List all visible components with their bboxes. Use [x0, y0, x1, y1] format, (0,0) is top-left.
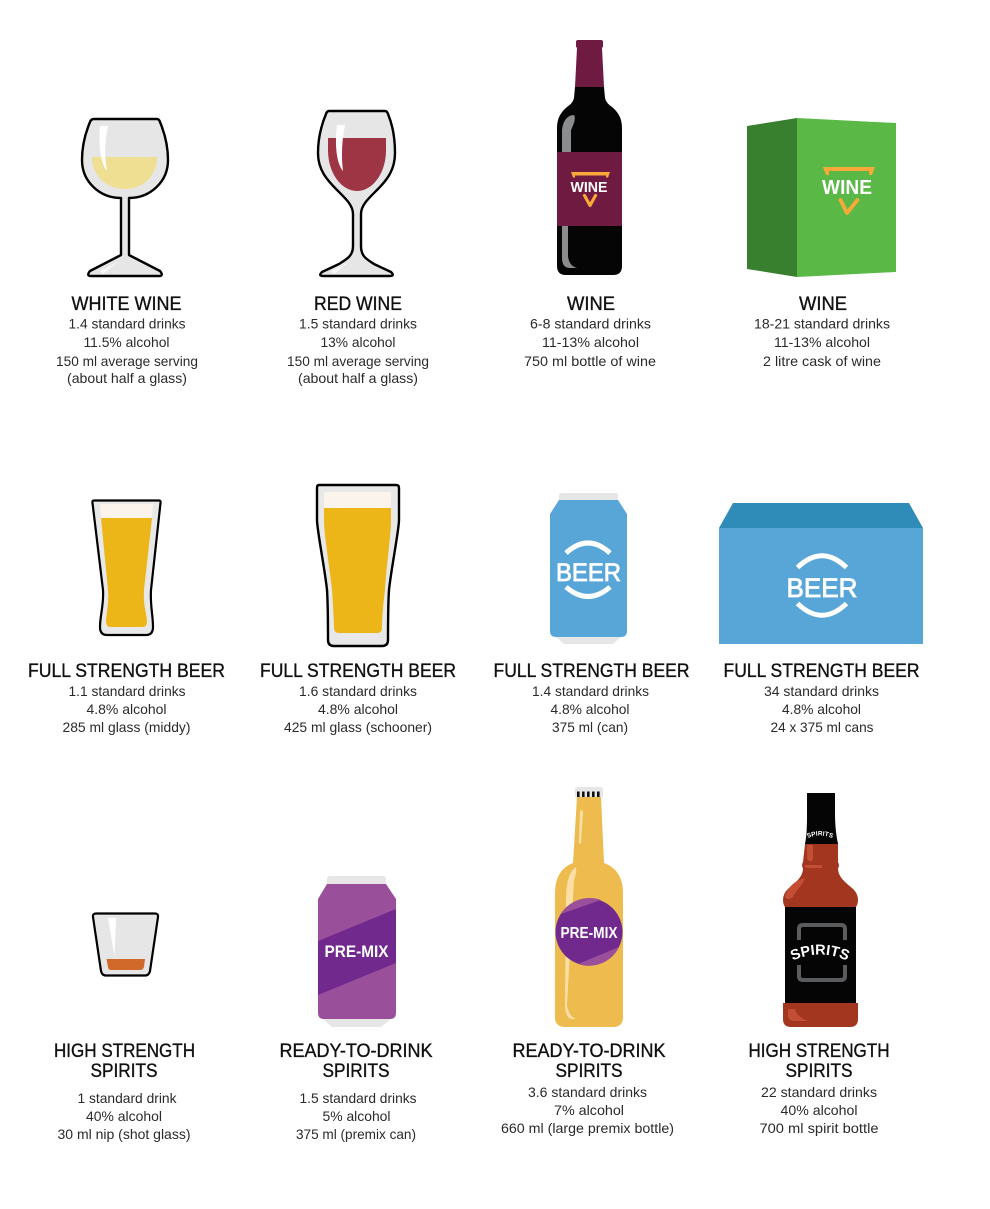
panel: wine cask [747, 118, 896, 369]
panel: beer middy [28, 500, 225, 735]
logo: wine cask label [822, 167, 875, 213]
text: spirits nip details: 1 standard drink [78, 1090, 177, 1106]
text: premix bottle details: 3.6 standard drinks [528, 1084, 647, 1100]
panel: red wine [287, 111, 429, 386]
panel: wine bottle [524, 40, 656, 369]
icon: spirits bottle [783, 793, 858, 1027]
text: beer can details: 375 ml (can) [552, 719, 628, 735]
text: premix bottle details: 660 ml (large premix bottle) [501, 1120, 674, 1136]
text: premix bottle details: 7% alcohol [554, 1102, 624, 1118]
text: wine bottle details: WINE [567, 294, 615, 315]
text: beer schooner details: FULL STRENGTH BEER [260, 661, 456, 682]
label: pre-mix: PRE-MIX [560, 925, 618, 942]
panel: beer carton [719, 503, 923, 735]
text: red wine details: 13% alcohol [320, 334, 396, 350]
icon: white wine glass [82, 119, 168, 276]
text: spirits nip details: 40% alcohol [86, 1108, 162, 1124]
text: premix can details: 375 ml (premix can) [296, 1126, 416, 1142]
text: wine cask details: 18-21 standard drinks [754, 316, 890, 332]
text: red wine details: 1.5 standard drinks [299, 316, 417, 332]
text: spirits bottle details: HIGH STRENGTH [748, 1041, 890, 1062]
text: wine cask details: 11-13% alcohol [774, 334, 870, 350]
text: beer schooner details: 425 ml glass (schooner) [284, 719, 432, 735]
text: beer can details: 4.8% alcohol [550, 701, 630, 717]
text: wine bottle details: 6-8 standard drinks [530, 316, 651, 332]
text: wine bottle details: 11-13% alcohol [542, 334, 639, 350]
text: spirits bottle details: 40% alcohol [780, 1102, 858, 1118]
text: wine cask details: WINE [799, 294, 847, 315]
text: beer schooner details: 4.8% alcohol [318, 701, 398, 717]
panel: beer can [494, 493, 690, 735]
text: beer carton details: 34 standard drinks [764, 683, 879, 699]
label: pre-mix: PRE-MIX [324, 942, 389, 961]
text: spirits bottle details: SPIRITS [786, 1061, 852, 1082]
text: premix can details: 5% alcohol [322, 1108, 390, 1124]
text: premix bottle details [501, 1041, 674, 1136]
text: beer carton details: 24 x 375 ml cans [770, 719, 874, 735]
panel: premix can [280, 876, 433, 1142]
text: beer schooner details [260, 661, 456, 735]
text: spirits nip details: 30 ml nip (shot glass) [58, 1126, 190, 1142]
icon: green wine cask [747, 118, 896, 277]
text: beer middy details: FULL STRENGTH BEER [28, 661, 225, 682]
text: white wine details [56, 294, 198, 386]
text: premix can details: READY-TO-DRINK [280, 1041, 433, 1062]
text: wine cask details: 2 litre cask of wine [763, 353, 881, 369]
logo: beer carton label [786, 556, 858, 615]
logo: beer can label [556, 543, 621, 596]
text: white wine details: 11.5% alcohol [84, 334, 170, 350]
text: red wine details: 150 ml average serving [287, 353, 429, 369]
text: spirits nip details: HIGH STRENGTH [54, 1041, 195, 1062]
text: spirits nip details [54, 1041, 195, 1142]
text: beer schooner details: 1.6 standard drinks [299, 683, 417, 699]
text: premix bottle details: READY-TO-DRINK [512, 1041, 666, 1062]
logo: beer carton label: BEER [786, 573, 858, 603]
text: beer carton details: FULL STRENGTH BEER [724, 661, 920, 682]
icon: shot glass [93, 914, 158, 976]
text: beer middy details: 1.1 standard drinks [68, 683, 186, 699]
text: spirits bottle details: 700 ml spirit bottle [760, 1120, 879, 1136]
text: red wine details: (about half a glass) [298, 370, 418, 386]
text: beer carton details [724, 661, 920, 735]
text: wine bottle details [524, 294, 656, 369]
logo: wine bottle label [570, 172, 610, 206]
icon: beer can [550, 493, 627, 644]
icon: middy glass [92, 500, 161, 635]
text: spirits bottle details [748, 1041, 890, 1136]
panel: white wine [56, 119, 198, 386]
text: premix can details [280, 1041, 433, 1142]
text: spirits nip details: SPIRITS [90, 1061, 158, 1082]
text: beer carton details: 4.8% alcohol [782, 701, 861, 717]
text: spirits bottle details: 22 standard drinks [761, 1084, 877, 1100]
icon: red wine glass [318, 111, 395, 276]
label: spirits neck: SPIRITS [806, 831, 834, 838]
panel: premix bottle [501, 787, 674, 1136]
icon: premix can [318, 876, 396, 1027]
panel: beer schooner [260, 485, 456, 735]
logo: beer can label: BEER [556, 559, 621, 587]
panel: spirits bottle [748, 793, 890, 1136]
logo: wine cask label: WINE [822, 177, 872, 199]
text: red wine details: RED WINE [314, 294, 402, 315]
text: beer middy details: 285 ml glass (middy) [62, 719, 190, 735]
text: premix can details: 1.5 standard drinks [300, 1090, 416, 1106]
text: wine cask details [754, 294, 890, 369]
text: beer middy details: 4.8% alcohol [86, 701, 166, 717]
icon: schooner glass [317, 485, 399, 646]
text: white wine details: (about half a glass) [67, 370, 187, 386]
text: beer can details [494, 661, 690, 735]
text: beer can details: FULL STRENGTH BEER [494, 661, 690, 682]
text: wine bottle details: 750 ml bottle of wine [524, 353, 656, 369]
text: premix can details: SPIRITS [322, 1061, 390, 1082]
text: beer can details: 1.4 standard drinks [532, 683, 649, 699]
icon: beer carton [719, 503, 923, 644]
icon: premix bottle [555, 787, 623, 1027]
panel: spirits nip [54, 914, 195, 1142]
icon: wine bottle [557, 40, 622, 275]
text: premix bottle details: SPIRITS [556, 1061, 622, 1082]
text: white wine details: 1.4 standard drinks [68, 316, 186, 332]
text: beer middy details [28, 661, 225, 735]
text: red wine details [287, 294, 429, 386]
logo: wine bottle label: WINE [570, 179, 608, 196]
text: white wine details: 150 ml average serving [56, 353, 198, 369]
text: white wine details: WHITE WINE [72, 294, 182, 315]
label: spirits arched: SPIRITS [790, 944, 850, 960]
